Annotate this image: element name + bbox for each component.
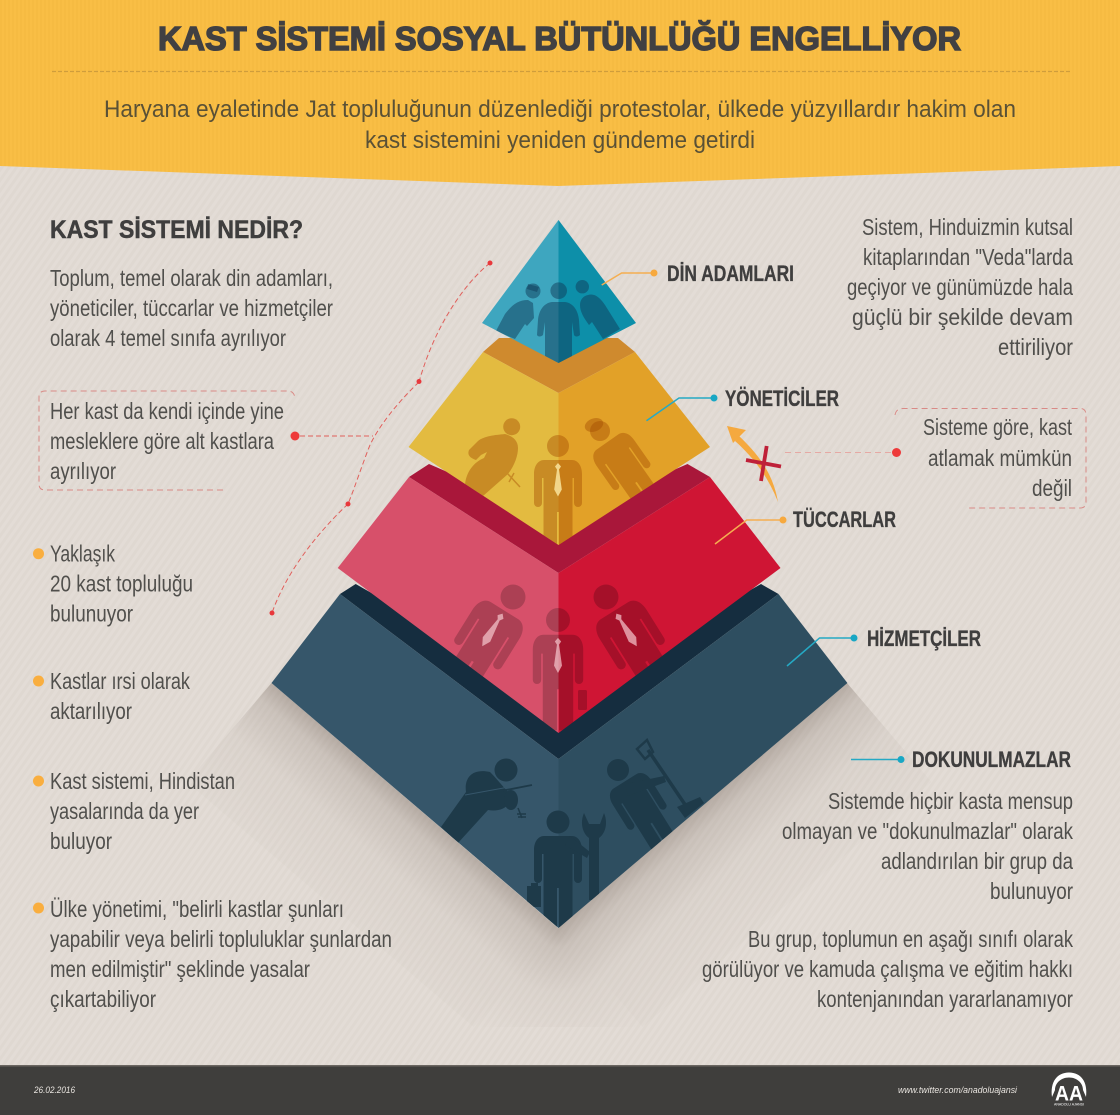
pyramid tier: din adamları (blue) bbox=[482, 220, 636, 363]
callout: sub-castes: ayrılıyor bbox=[50, 458, 116, 484]
bullet: governance: men edilmiştir" şeklinde yasalar bbox=[50, 956, 310, 982]
text: veda origin: geçiyor ve günümüzde hala bbox=[847, 274, 1073, 300]
text: veda origin: Sistem, Hinduizmin kutsal bbox=[862, 214, 1073, 240]
text: four classes: olarak 4 temel sınıfa ayrılıyor bbox=[50, 325, 286, 351]
bullet: governance: Ülke yönetimi, "belirli kastlar şunları bbox=[50, 896, 344, 922]
subtitle: Haryana eyaletinde Jat topluluğunun düzenlediği protestolar, ülkede yüzyıllardır hakim olan bbox=[104, 96, 1016, 123]
label: hizmetçiler bbox=[787, 626, 981, 666]
icons: merchants bbox=[454, 584, 665, 730]
text: four classes: Toplum, temel olarak din adamları, bbox=[50, 265, 333, 291]
pyramid tier: tüccarlar (red) bbox=[338, 464, 780, 733]
text: untouchables definition: bulunuyor bbox=[990, 878, 1073, 904]
callout: no caste jumping bbox=[785, 408, 1086, 508]
bullet: law: yasalarında da yer bbox=[50, 798, 199, 824]
footer url: www.twitter.com/anadoluajansi bbox=[898, 1085, 1018, 1096]
header banner bbox=[0, 0, 1120, 186]
bullet: law: buluyor bbox=[50, 828, 112, 854]
bullet: law bbox=[33, 768, 235, 854]
connector: dashed red path bbox=[270, 260, 492, 616]
callout: sub-castes bbox=[39, 391, 300, 490]
bullet: hereditary: aktarılıyor bbox=[50, 698, 132, 724]
bullet: yaklaşık 20 kast: 20 kast topluluğu bbox=[50, 570, 193, 596]
logo: AA: ANADOLU AJANSI bbox=[1054, 1102, 1084, 1106]
icons: rulers bbox=[465, 418, 654, 544]
text: veda origin bbox=[847, 214, 1073, 360]
subtitle: kast sistemini yeniden gündeme getirdi bbox=[365, 127, 755, 154]
pyramid tier: yöneticiler (yellow) bbox=[408, 338, 710, 551]
text: four classes: yöneticiler, tüccarlar ve hizmetçiler bbox=[50, 295, 333, 321]
text: veda origin: güçlü bir şekilde devam bbox=[852, 304, 1073, 330]
text: veda origin: ettiriliyor bbox=[998, 334, 1073, 360]
callout: sub-castes: Her kast da kendi içinde yine bbox=[50, 398, 284, 424]
callout: no caste jumping: atlamak mümkün bbox=[928, 445, 1072, 471]
text: untouchables rights bbox=[702, 926, 1073, 1012]
text: untouchables definition: adlandırılan bir grup da bbox=[881, 848, 1073, 874]
label: yöneticiler bbox=[646, 386, 839, 421]
bullet: hereditary bbox=[33, 668, 190, 724]
pyramid tier: hizmetçiler (dark) bbox=[272, 584, 847, 928]
label: din adamları bbox=[602, 261, 794, 286]
bullet: governance: çıkartabiliyor bbox=[50, 986, 156, 1012]
bullet: yaklaşık 20 kast: bulunuyor bbox=[50, 600, 133, 626]
bullet: governance: yapabilir veya belirli topluluklar şunlardan bbox=[50, 926, 392, 952]
label: dokunulmazlar: DOKUNULMAZLAR bbox=[912, 747, 1071, 772]
pyramid shadow bbox=[187, 683, 932, 1027]
text: untouchables definition bbox=[782, 788, 1073, 904]
label: tüccarlar: TÜCCARLAR bbox=[793, 507, 896, 532]
label: dokunulmazlar bbox=[851, 747, 1071, 772]
bullet: yaklaşık 20 kast bbox=[33, 540, 193, 626]
bullet: law: Kast sistemi, Hindistan bbox=[50, 768, 235, 794]
bullet: governance bbox=[33, 896, 392, 1012]
heading: kast sistemi nedir: KAST SİSTEMİ NEDİR? bbox=[50, 216, 303, 244]
label: tüccarlar bbox=[715, 507, 896, 544]
logo: AA bbox=[1052, 1072, 1086, 1106]
bullet: yaklaşık 20 kast: Yaklaşık bbox=[50, 540, 115, 566]
callout: sub-castes: mesleklere göre alt kastlara bbox=[50, 428, 274, 454]
footer bar bbox=[0, 1065, 1120, 1115]
footer date: 26.02.2016 bbox=[33, 1085, 76, 1096]
label: din adamları: DİN ADAMLARI bbox=[667, 261, 794, 286]
bullet: hereditary: Kastlar ırsi olarak bbox=[50, 668, 190, 694]
label: yöneticiler: YÖNETİCİLER bbox=[725, 386, 839, 411]
label: hizmetçiler: HİZMETÇİLER bbox=[867, 626, 981, 651]
icons: workers bbox=[441, 740, 704, 927]
logo: AA: AA bbox=[1055, 1082, 1083, 1106]
icons: clerics bbox=[496, 280, 620, 363]
callout: no caste jumping: değil bbox=[1032, 475, 1072, 501]
title: KAST SİSTEMİ SOSYAL BÜTÜNLÜĞÜ ENGELLİYOR bbox=[158, 20, 961, 57]
arrow: blocked caste jump bbox=[727, 426, 781, 502]
text: four classes bbox=[50, 265, 333, 351]
callout: no caste jumping: Sisteme göre, kast bbox=[923, 414, 1072, 440]
subtitle bbox=[104, 96, 1016, 154]
text: veda origin: kitaplarından "Veda"larda bbox=[863, 244, 1073, 270]
